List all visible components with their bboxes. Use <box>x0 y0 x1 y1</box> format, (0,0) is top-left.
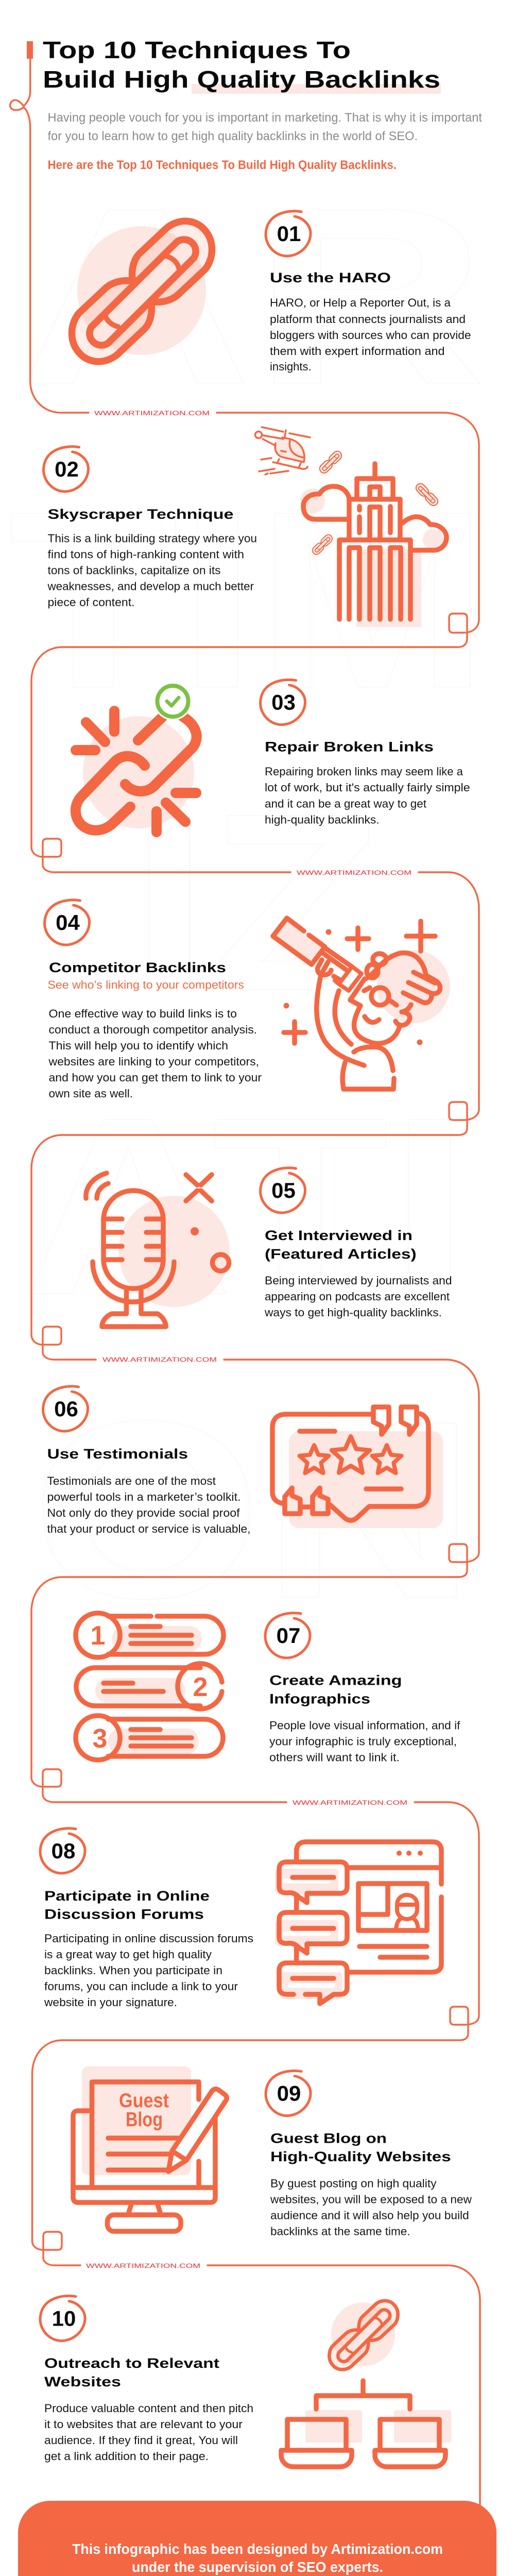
body text <box>47 1475 250 1535</box>
body text: audience. If they find it great, You will <box>44 2434 238 2447</box>
icon: person looking through telescope <box>273 918 450 1089</box>
number badge 01 <box>266 211 311 256</box>
section 10: Outreach to Relevant Websites <box>40 2296 451 2467</box>
body text: websites are linking to your competitors, <box>48 1055 259 1068</box>
body text <box>265 765 470 826</box>
watermark letters: TIM <box>8 459 489 741</box>
heading <box>269 1672 402 1707</box>
body text: that your product or service is valuable, <box>47 1522 250 1535</box>
number badge 06 <box>43 1386 88 1431</box>
body text: forums, you can include a link to your <box>44 1980 238 1993</box>
heading: Use the HARO <box>270 270 391 285</box>
number badge 02 <box>43 447 89 492</box>
heading <box>44 1888 210 1922</box>
heading: Repair Broken Links <box>265 739 434 754</box>
body text: Not only do they provide social proof <box>47 1506 240 1519</box>
section 04: Competitor Backlinks <box>44 900 450 1100</box>
body text: conduct a thorough competitor analysis. <box>48 1023 257 1036</box>
icon: numbered list <box>76 1613 224 1760</box>
heading <box>265 1228 417 1262</box>
body text: This will help you to identify which <box>48 1039 228 1052</box>
body text: This is a link building strategy where you <box>47 532 257 545</box>
icon: browser window with chat bubbles <box>275 1842 441 2004</box>
body text <box>48 1007 262 1100</box>
body text: One effective way to build links is to <box>48 1007 237 1020</box>
body text: appearing on podcasts are excellent <box>265 1290 450 1303</box>
body text: weaknesses, and develop a much better <box>47 580 254 593</box>
number badge 02: 02 <box>55 457 79 481</box>
body text: People love visual information, and if <box>269 1719 460 1732</box>
body text: high-quality backlinks. <box>265 813 380 826</box>
number badge 05: 05 <box>271 1178 296 1202</box>
subheading: See who’s linking to your competitors <box>47 978 244 991</box>
body text: Produce valuable content and then pitch <box>44 2402 253 2415</box>
body text: Participating in online discussion forums <box>44 1932 253 1945</box>
heading: Guest Blog on <box>270 2131 387 2146</box>
number badge 09: 09 <box>277 2081 301 2106</box>
icon: link with connected laptops <box>281 2301 451 2467</box>
heading: Use Testimonials <box>47 1446 188 1462</box>
website label 4: WWW.ARTIMIZATION.COM <box>293 1799 407 1806</box>
footer credit text: This infographic has been designed by Artimization.com <box>72 2541 443 2557</box>
body text: is a great way to get high quality <box>44 1948 212 1961</box>
icon: numbered list: 2 <box>193 1672 208 1702</box>
intro paragraph: Having people vouch for you is important in marketing. That is why it is important <box>47 111 482 125</box>
title: Build High Quality Backlinks <box>43 66 440 93</box>
section 01: Use the HARO <box>72 211 471 373</box>
icon: numbered list: 3 <box>93 1724 107 1754</box>
website label 3: WWW.ARTIMIZATION.COM <box>102 1356 217 1363</box>
number badge 10 <box>40 2296 85 2341</box>
number badge 05 <box>261 1168 305 1213</box>
section 03: Repair Broken Links <box>76 680 470 832</box>
website label 1: WWW.ARTIMIZATION.COM <box>94 410 210 417</box>
icon: monitor with guest blog page and pencil <box>73 2066 227 2231</box>
number badge 09 <box>266 2071 311 2116</box>
heading: Competitor Backlinks <box>49 960 226 975</box>
footer credit text <box>72 2541 443 2575</box>
heading <box>270 2131 451 2164</box>
body text: tons of backlinks, capitalize on its <box>47 564 221 577</box>
section 08: Online Discussion Forums <box>40 1828 441 2009</box>
heading <box>44 2355 219 2389</box>
section 02: Skyscraper Technique <box>43 427 447 627</box>
icon: monitor with guest blog page and pencil: Blog <box>126 2109 163 2131</box>
watermark letters: AR <box>18 156 487 438</box>
body text: get a link addition to their page. <box>44 2450 209 2463</box>
title: Top 10 Techniques To <box>43 37 351 63</box>
icon: microphone <box>86 1173 230 1327</box>
intro paragraph: for you to learn how to get high quality backlinks in the world of SEO. <box>47 129 418 143</box>
body text: Testimonials are one of the most <box>47 1475 216 1487</box>
heading: Skyscraper Technique <box>47 506 234 522</box>
body text: bloggers with sources who can provide <box>270 329 471 342</box>
body text: it to websites that are relevant to your <box>44 2418 243 2431</box>
heading: Infographics <box>269 1691 370 1707</box>
icon: broken link with check mark <box>76 685 197 832</box>
section 07: Create Amazing Infographics <box>76 1613 460 1764</box>
body text: backlinks at the same time. <box>270 2225 410 2238</box>
body text <box>270 296 471 373</box>
intro paragraph <box>47 111 482 143</box>
number badge 08: 08 <box>52 1839 75 1863</box>
body text: backlinks. When you participate in <box>44 1964 222 1977</box>
number badge 04: 04 <box>56 910 80 935</box>
body text: them with expert information and <box>270 345 445 358</box>
number badge 06: 06 <box>54 1397 78 1421</box>
body text: piece of content. <box>47 596 135 609</box>
icon: skyscraper with clouds and helicopter <box>255 427 447 627</box>
icon: chain link <box>72 221 212 362</box>
number badge 03: 03 <box>271 690 296 715</box>
body text: lot of work, but it's actually fairly simple <box>265 781 470 794</box>
title accent bar <box>27 41 33 59</box>
footer panel <box>18 2501 496 2576</box>
section 05: Get Interviewed <box>86 1168 452 1327</box>
body text: websites, you will be exposed to a new <box>270 2193 472 2206</box>
body text: By guest posting on high quality <box>270 2177 437 2190</box>
footer credit text: under the supervision of SEO experts. <box>132 2559 383 2575</box>
body text: HARO, or Help a Reporter Out, is a <box>270 296 451 309</box>
body text <box>270 2177 472 2238</box>
heading: Discussion Forums <box>44 1906 204 1922</box>
heading: (Featured Articles) <box>265 1246 417 1262</box>
watermark letters: ON <box>31 1369 476 1651</box>
body text: own site as well. <box>48 1087 133 1100</box>
body text: website in your signature. <box>44 1996 177 2009</box>
number badge 10: 10 <box>52 2306 76 2331</box>
watermark letters <box>8 156 489 1651</box>
watermark letters: IZ <box>130 761 383 1044</box>
heading: Create Amazing <box>269 1672 402 1688</box>
body text: your infographic is truly exceptional, <box>269 1735 457 1748</box>
intro highlight line: Here are the Top 10 Techniques To Build High Quality Backlinks. <box>47 158 397 172</box>
body text <box>44 2402 253 2463</box>
body text: insights. <box>270 360 312 373</box>
heading: Participate in Online <box>44 1888 210 1904</box>
body text <box>44 1932 253 2009</box>
website label 2: WWW.ARTIMIZATION.COM <box>297 869 411 876</box>
number badge 07: 07 <box>277 1623 300 1648</box>
body text: and how you can get them to link to your <box>48 1071 262 1084</box>
number badge 03 <box>261 680 305 725</box>
body text: Being interviewed by journalists and <box>265 1274 452 1287</box>
number badge 04 <box>44 900 90 945</box>
body text: powerful tools in a marketer’s toolkit. <box>47 1490 241 1503</box>
body text: ways to get high-quality backlinks. <box>264 1306 442 1319</box>
body text: platform that connects journalists and <box>270 313 466 326</box>
body text <box>264 1274 452 1319</box>
icon: numbered list: 1 <box>91 1621 105 1651</box>
website label 5: WWW.ARTIMIZATION.COM <box>86 2262 200 2269</box>
body text: others will want to link it. <box>269 1751 400 1764</box>
icon: monitor with guest blog page and pencil: Guest <box>119 2090 169 2112</box>
body text <box>269 1719 460 1764</box>
heading: Outreach to Relevant <box>44 2355 219 2371</box>
body text: and it can be a great way to get <box>265 798 426 810</box>
heading: Get Interviewed in <box>265 1228 413 1243</box>
number badge 01: 01 <box>277 222 301 246</box>
body text: find tons of high-ranking content with <box>47 548 244 561</box>
number badge 08 <box>40 1828 85 1873</box>
title <box>43 37 441 94</box>
heading: High-Quality Websites <box>270 2149 451 2164</box>
section 09: Guest Blog <box>73 2066 472 2238</box>
watermark letters: ATI <box>23 1065 470 1348</box>
section 06: Use Testimonials <box>43 1386 443 1535</box>
number badge 07 <box>265 1613 310 1658</box>
icon: speech bubble with star rating <box>272 1407 443 1528</box>
body text: Repairing broken links may seem like a <box>265 765 464 778</box>
heading: Websites <box>44 2374 121 2389</box>
body text <box>47 532 257 609</box>
body text: audience and it will also help you build <box>270 2209 469 2222</box>
